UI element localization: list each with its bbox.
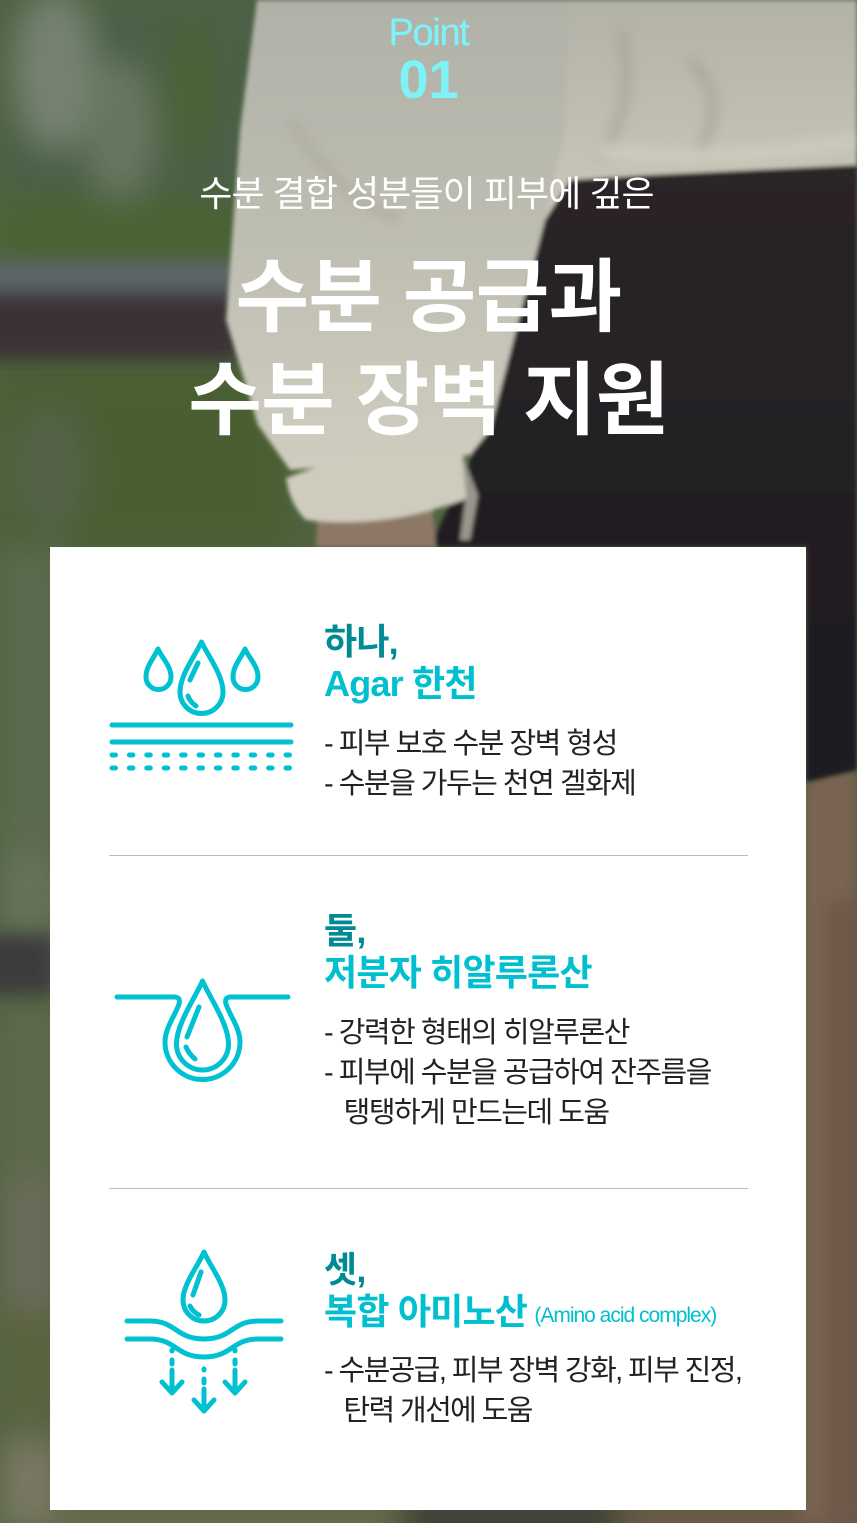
text: item 2 <box>324 1017 711 1129</box>
text: item 1: - 피부 보호 수분 장벽 형성 <box>324 728 617 760</box>
heading: Point label: Point <box>388 12 469 54</box>
divider <box>109 1188 748 1189</box>
title: 수분 장벽 지원 <box>188 356 669 445</box>
panel: ingredients <box>50 547 806 1510</box>
icon: drop in skin pore <box>114 978 290 1082</box>
text: item 1 <box>324 728 635 800</box>
heading: item 3 <box>324 1249 716 1332</box>
heading: item 2: 둘, <box>324 910 366 951</box>
text: item 2: 탱탱하게 만드는데 도움 <box>344 1097 609 1129</box>
heading: item 3: 셋, <box>324 1249 366 1290</box>
heading: item 3: 복합 아미노산 (Amino acid complex) <box>324 1291 716 1332</box>
sleeve <box>226 0 570 470</box>
subtitle: 수분 결합 성분들이 피부에 깊은 <box>199 173 654 214</box>
text: item 3 <box>324 1355 741 1427</box>
jacket body <box>545 0 857 220</box>
title: 수분 공급과 <box>235 253 622 342</box>
title <box>188 253 669 445</box>
arm <box>316 500 436 547</box>
heading: item 2 <box>324 910 592 993</box>
icon: water drops over skin layers <box>110 640 294 770</box>
text: item 1: - 수분을 가두는 천연 겔화제 <box>324 768 635 800</box>
heading: item 1 <box>324 621 477 704</box>
text: item 3: 탄력 개선에 도움 <box>343 1395 532 1427</box>
cuff <box>286 451 476 522</box>
heading: item 1: 하나, <box>324 621 398 662</box>
shorts <box>430 165 857 782</box>
text: item 2: - 강력한 형태의 히알루론산 <box>324 1017 629 1049</box>
heading: item 2: 저분자 히알루론산 <box>324 952 592 993</box>
text: item 3: - 수분공급, 피부 장벽 강화, 피부 진정, <box>324 1355 741 1387</box>
heading: item 1: Agar 한천 <box>324 663 477 704</box>
icon: drop penetrating skin with arrows <box>124 1250 284 1414</box>
text: item 2: - 피부에 수분을 공급하여 잔주름을 <box>324 1057 711 1089</box>
divider <box>109 855 748 856</box>
heading: number 01: 01 <box>398 50 459 110</box>
